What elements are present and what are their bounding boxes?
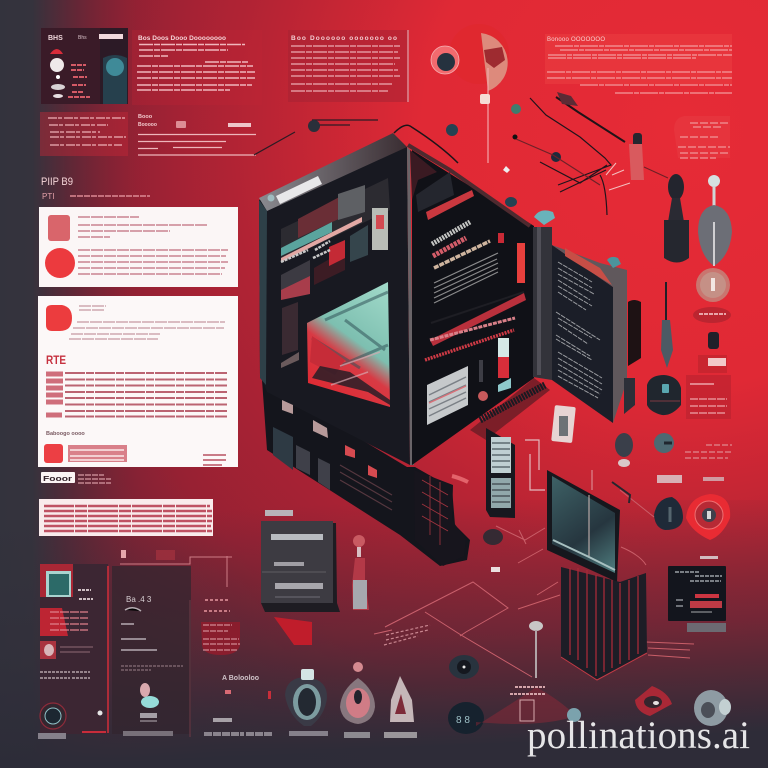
- text block: stats strip: Booo: [138, 114, 153, 120]
- icon: teal orb: [567, 708, 581, 722]
- wires near ring: [496, 490, 694, 658]
- icon: pin stand: [476, 621, 576, 726]
- red heading: RTE: [46, 353, 66, 367]
- panel: bottom middle column: [112, 550, 232, 737]
- icon: probe top: [629, 133, 668, 180]
- floor text: [384, 625, 430, 645]
- label tag: Fooor: [43, 474, 72, 483]
- icon: small discs: [654, 433, 732, 458]
- base rack: [470, 378, 550, 440]
- wires: top: [254, 92, 630, 215]
- lower stack: [262, 380, 470, 566]
- small bracket: [525, 440, 545, 490]
- text block: top second column: [288, 30, 409, 102]
- text lines: card one: [78, 217, 228, 274]
- door text: [556, 262, 602, 398]
- red wedge: [274, 617, 312, 645]
- label: red pill: [693, 307, 731, 323]
- mini screen: [46, 571, 71, 597]
- icon: dark bird badge: [635, 686, 672, 716]
- text block: top intro: [132, 30, 262, 105]
- tower left face: [259, 147, 410, 465]
- icon: red badge: [46, 305, 72, 331]
- left edge: [259, 200, 267, 385]
- tower top cap: [259, 133, 407, 211]
- icon: bottle: [352, 535, 369, 610]
- icon: pink drop: [340, 662, 375, 738]
- panel: top left dark leaflet: [41, 28, 128, 104]
- icon: dark stylus: [664, 174, 689, 262]
- icon: dark helmet: [654, 497, 683, 530]
- side speaker grille: [282, 302, 298, 355]
- heading: left section: PIIP B9: [41, 176, 73, 188]
- illustration: striped base: [561, 567, 647, 680]
- icon: dark puck: [448, 702, 484, 734]
- text block: right note: [674, 116, 730, 158]
- label: bottom middle caption: A Bolooloo: [222, 675, 259, 682]
- panel: bottom middle column: Ba .4 3: [126, 595, 152, 604]
- door handle: [628, 300, 641, 366]
- sub label: Baboogo oooo: [46, 431, 85, 437]
- lower components: [273, 400, 392, 510]
- text block: left lower notes: [40, 112, 128, 156]
- stripe panel: [427, 366, 468, 425]
- panel: bottom left column: [38, 564, 108, 739]
- icon: grey mouse: [698, 175, 732, 266]
- panel: white band: [39, 499, 213, 536]
- door panel: [552, 245, 613, 423]
- icon: bulb: [696, 268, 730, 302]
- label: bottom middle caption: [204, 675, 273, 734]
- upper wedge: [410, 150, 437, 200]
- icon: small speaker: [449, 655, 479, 679]
- icon: grey cone: [385, 676, 417, 737]
- screen: [307, 282, 390, 407]
- small chip device: [551, 405, 576, 443]
- side bars: [46, 374, 63, 415]
- icon: teal bulb: [285, 669, 328, 736]
- text block: top right: Bonooo OOOOOOO: [547, 37, 605, 43]
- panel: white card two: [38, 296, 238, 467]
- icon: dark puck: 8 8: [456, 715, 470, 726]
- panel: white card one: [39, 207, 238, 287]
- red square: [44, 444, 63, 463]
- icon: red ring badge: [686, 494, 730, 540]
- dark card right: [668, 556, 726, 632]
- text block: stats strip: [138, 114, 256, 155]
- tall handset: [486, 428, 515, 518]
- icon: pen: [661, 282, 673, 368]
- panel: bottom callout red shield: [201, 600, 240, 655]
- panel: top left dark leaflet: BHS: [48, 35, 63, 42]
- heading: left section: [41, 176, 150, 201]
- text block: right small: [686, 375, 731, 419]
- body lines: [65, 373, 227, 416]
- spine: [407, 147, 414, 465]
- icon: small pod: [483, 529, 503, 572]
- illustration: monitor: [547, 470, 630, 582]
- illustration: computer tower: [259, 125, 641, 566]
- corner note: [203, 455, 226, 465]
- text block: stats strip: Booooo: [138, 122, 157, 128]
- tower right face: [412, 150, 534, 465]
- small lamp icon: [615, 433, 633, 467]
- rack stripes: [432, 222, 470, 244]
- text block: top second column: Boo Doooooo ooooooo oo: [291, 35, 397, 42]
- watermark: pollinations.ai: [527, 714, 750, 757]
- upper display content: [281, 178, 390, 300]
- icon: red circle: [45, 248, 75, 278]
- panel: top left dark leaflet: Bhs: [78, 35, 87, 41]
- icon: grey plug: [694, 690, 731, 726]
- text block: top intro: Bos Doos Dooo Doooooooo: [138, 35, 226, 42]
- cap label: [276, 176, 322, 204]
- text block: top right: [545, 34, 732, 93]
- footer label strip: [384, 732, 417, 738]
- lens icon: [40, 703, 66, 729]
- label tag: [41, 472, 111, 483]
- icon: dark round button: [647, 375, 681, 415]
- grey device panel: [261, 510, 340, 612]
- bar meter: [498, 338, 511, 392]
- heading: left section: PTI: [42, 192, 54, 201]
- card two intro lines: [69, 306, 225, 339]
- icon: red note: [48, 215, 70, 241]
- thin diagonal lines: floor: [374, 582, 532, 677]
- labels above ring: [657, 475, 724, 483]
- icon: circular lens top: [431, 24, 521, 163]
- dark grid unit: [414, 470, 468, 566]
- door frame: [533, 227, 552, 380]
- icon: dark square: [708, 332, 719, 349]
- teal knobs: [534, 210, 555, 225]
- label: red tag: [698, 355, 727, 373]
- red bar block: [68, 445, 127, 462]
- flask icon: [140, 683, 159, 721]
